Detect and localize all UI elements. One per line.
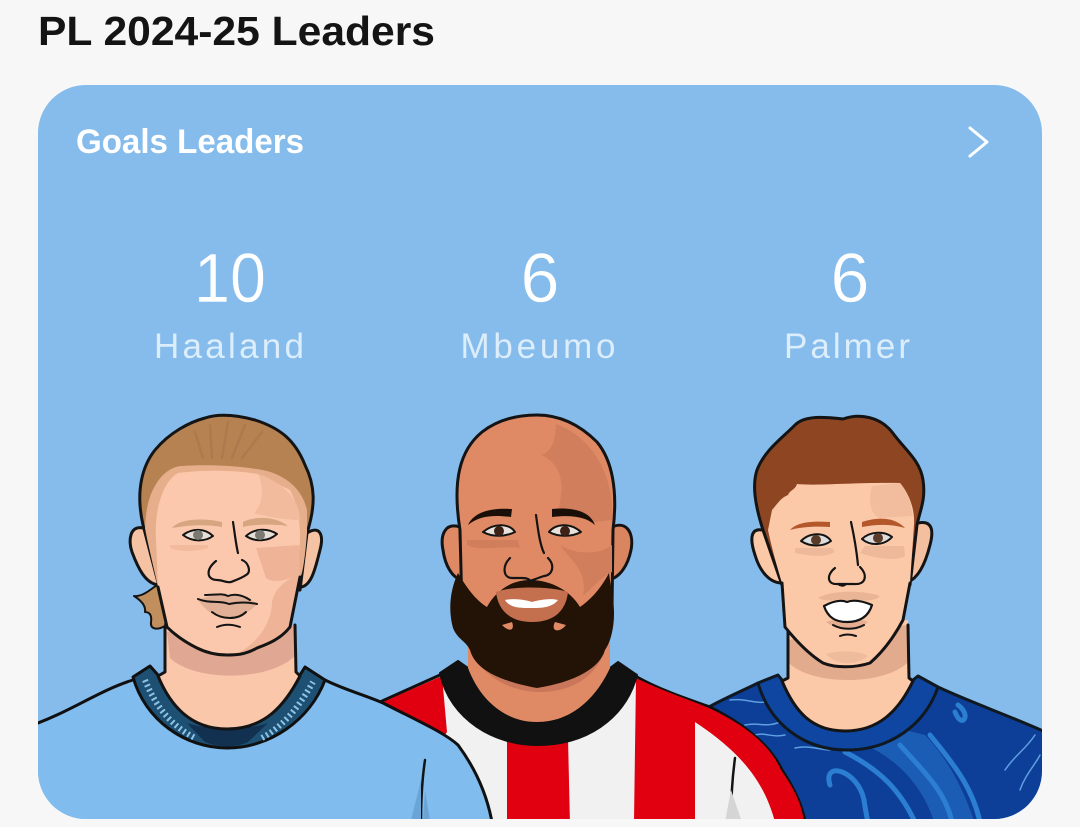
- nose: Haaland: [209, 522, 249, 582]
- ears: Mbeumo: [442, 526, 462, 580]
- stat: Mbeumo goals: [460, 239, 616, 366]
- stat: Haaland goals: Haaland: [154, 327, 304, 366]
- title: PL 2024-25 Leaders: [38, 8, 435, 54]
- icon: chevron arrow: [970, 128, 987, 156]
- ears: Haaland: [130, 528, 162, 585]
- stat: Mbeumo goals: Mbeumo: [460, 327, 616, 366]
- ears: Palmer: [750, 528, 780, 584]
- neck: Haaland: [158, 625, 300, 728]
- stat: Haaland goals: 10: [194, 239, 266, 317]
- shirt: Palmer: [700, 683, 1050, 825]
- shirt: Haaland: [30, 680, 493, 827]
- sleeve fold: Haaland: [421, 760, 425, 822]
- hair tuft: Haaland: [134, 585, 170, 629]
- head: Mbeumo: [457, 415, 615, 610]
- eyes: Palmer: [801, 533, 892, 546]
- brows: Palmer: [790, 519, 905, 530]
- brows: Haaland: [172, 518, 288, 528]
- red stripes: Mbeumo: [383, 676, 804, 825]
- shirt: Mbeumo: [380, 675, 806, 825]
- card heading: Goals Leaders: [76, 123, 304, 161]
- player: Haaland: [30, 415, 493, 827]
- neck: Mbeumo: [468, 640, 610, 722]
- face: Haaland: [145, 465, 307, 586]
- stat: Mbeumo goals: 6: [521, 239, 559, 317]
- nose: Mbeumo: [505, 515, 552, 581]
- jawline: Haaland: [158, 577, 300, 655]
- mouth: Mbeumo: [496, 588, 568, 622]
- eyes: Haaland: [183, 530, 277, 540]
- collar: Haaland: [133, 666, 325, 748]
- hair and head: Haaland: [140, 415, 313, 590]
- eyes: Mbeumo: [483, 525, 581, 536]
- illustrations of the three players: [30, 415, 1050, 827]
- player: Palmer: [700, 416, 1050, 825]
- collar: Mbeumo: [440, 661, 637, 745]
- mouth: Palmer: [818, 592, 880, 600]
- stat: Palmer goals: Palmer: [784, 327, 910, 366]
- brows: Mbeumo: [468, 508, 595, 525]
- stat: Haaland goals: [154, 239, 304, 366]
- stat: Palmer goals: [784, 239, 910, 366]
- face: Palmer: [768, 483, 914, 667]
- jawline: Palmer: [782, 583, 910, 667]
- beard: Mbeumo: [450, 573, 614, 688]
- mouth: Haaland: [198, 596, 257, 618]
- hair and head: Palmer: [755, 416, 924, 585]
- stat: Palmer goals: 6: [831, 239, 869, 317]
- neck: Palmer: [782, 620, 913, 730]
- player: Mbeumo: [380, 415, 806, 825]
- sleeve fold: Mbeumo: [731, 758, 735, 822]
- nose: Palmer: [829, 522, 865, 586]
- collar: Palmer: [758, 675, 938, 750]
